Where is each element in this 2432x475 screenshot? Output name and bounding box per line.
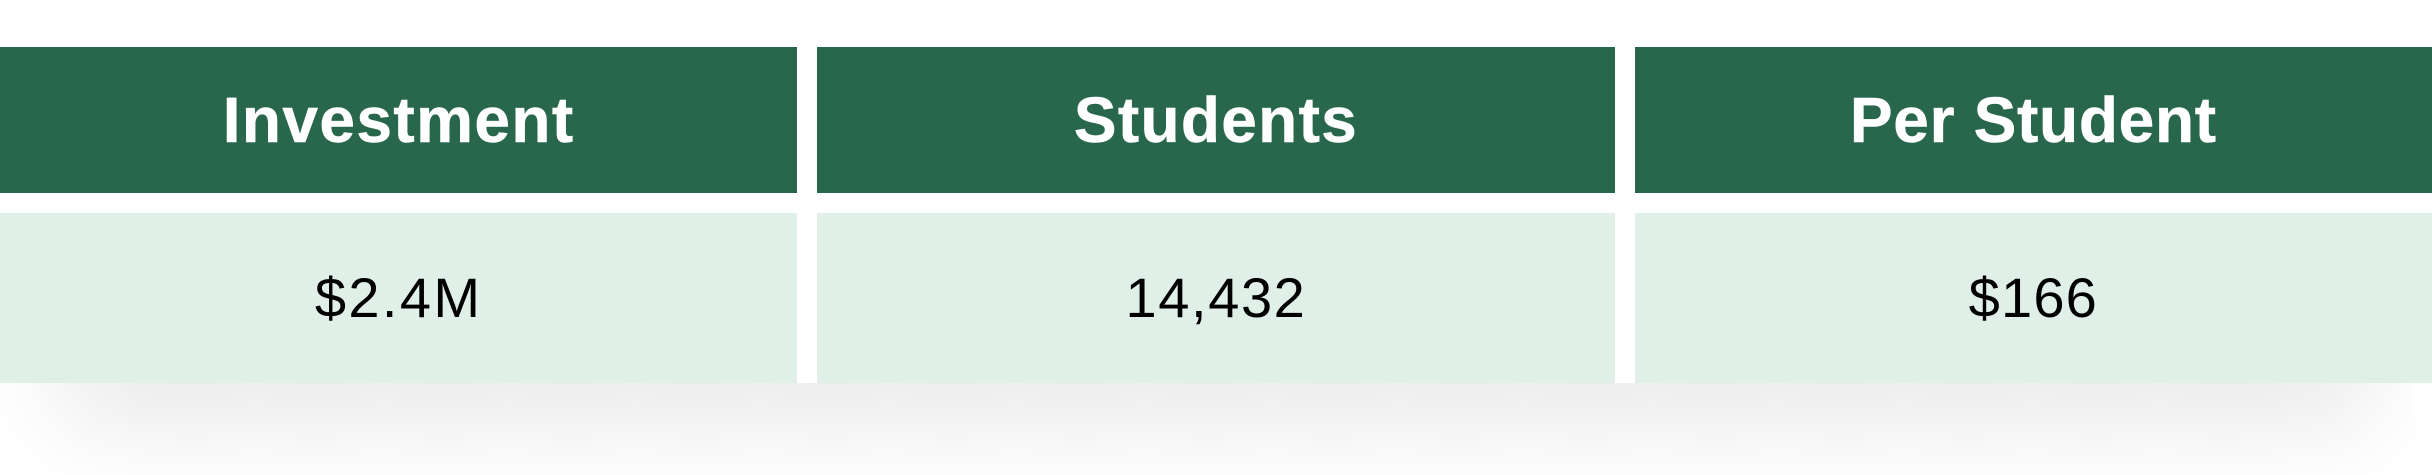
header: Investment — [0, 47, 797, 193]
cell: investment value — [0, 213, 797, 383]
header: Per Student — [1635, 47, 2432, 193]
cell: per student value: $166 — [1969, 266, 2098, 329]
cell: students value: 14,432 — [1126, 266, 1306, 329]
header: Per Student: Per Student — [1850, 84, 2217, 156]
data table — [0, 47, 2432, 383]
header: Investment: Investment — [223, 84, 575, 156]
cell: students value — [817, 213, 1615, 383]
cell: per student value — [1635, 213, 2432, 383]
header: Students: Students — [1074, 84, 1358, 156]
header: Students — [817, 47, 1615, 193]
cell: investment value: $2.4M — [315, 266, 482, 329]
